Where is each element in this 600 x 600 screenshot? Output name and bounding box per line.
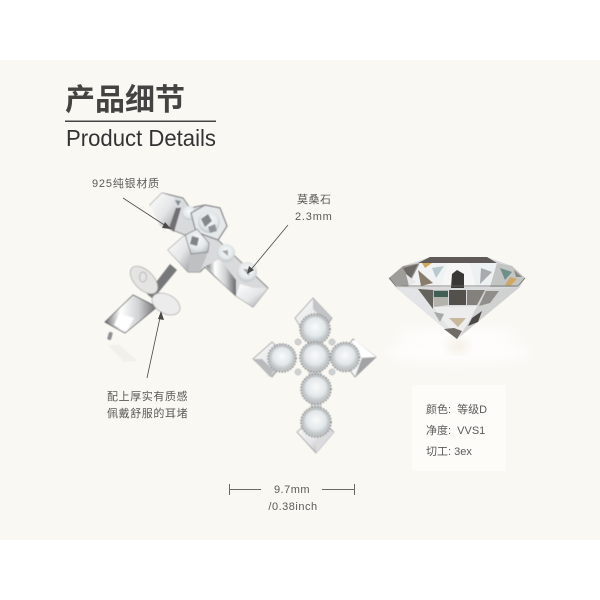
- stone: top: [300, 314, 330, 344]
- lower hexagon body: [168, 235, 192, 272]
- arrowhead: [158, 311, 164, 320]
- lower hexagon stone: [185, 229, 209, 254]
- diamond body: [389, 257, 525, 339]
- specification card: [412, 385, 506, 471]
- right arm lower band: [206, 259, 236, 296]
- leader line: [123, 198, 169, 228]
- pin reflection: [108, 345, 137, 362]
- stone: left: [268, 344, 296, 372]
- heading rule: [65, 120, 216, 122]
- pavilion facets: [395, 287, 520, 339]
- lower hexagon side: [188, 252, 208, 272]
- dimension bar right: [322, 484, 354, 495]
- dimension bar left: [230, 484, 261, 495]
- stone: right: [330, 342, 360, 372]
- arrowhead: [162, 222, 171, 229]
- stone: lower: [301, 374, 331, 404]
- label: silver: 925纯银材质: [92, 176, 160, 190]
- lower hexagon facet: [190, 236, 199, 246]
- callout: ear back: [107, 311, 188, 420]
- dimension value mm: 9.7mm: [274, 484, 310, 496]
- right arm stones: [217, 244, 257, 282]
- diamond girdle: [389, 278, 525, 286]
- crown facets: [389, 263, 525, 288]
- callout: silver material: [92, 176, 171, 229]
- left tip: [253, 342, 288, 377]
- right arm end cap: [236, 284, 268, 307]
- top arm stones: [173, 198, 196, 220]
- label: size: 2.3mm: [295, 211, 333, 223]
- diamond table band: [418, 257, 497, 263]
- leader line: [249, 225, 288, 272]
- arrowhead: [247, 266, 254, 274]
- clutch highlight: [114, 314, 134, 331]
- title: English: Product Details: [66, 125, 216, 151]
- top tip: [295, 298, 332, 336]
- label: line one: 配上厚实有质感: [107, 389, 188, 403]
- upper hexagon stone facets: [198, 211, 220, 233]
- card background: [412, 385, 506, 471]
- clutch barrel: [105, 295, 157, 333]
- width dimension: [230, 484, 354, 513]
- front view cross earring: [253, 298, 376, 453]
- top arm end: [150, 193, 178, 228]
- dimension value inch: /0.38inch: [268, 501, 318, 513]
- stone: centre: [300, 342, 330, 372]
- spec: cut: 切工: 3ex: [426, 445, 472, 458]
- label: line two: 佩戴舒服的耳堵: [107, 406, 188, 420]
- side view earring: [105, 193, 268, 362]
- upper hexagon bezel: [191, 205, 227, 240]
- cream panel: [0, 60, 600, 540]
- spec: colour: 颜色: 等级D: [426, 402, 487, 416]
- heading: [65, 84, 216, 151]
- callout: moissanite: [247, 193, 333, 274]
- title: Chinese: 产品细节: [65, 84, 185, 117]
- centre connectors: [295, 339, 335, 412]
- diamond: [385, 257, 529, 363]
- back disc: [125, 261, 163, 299]
- post: [147, 264, 177, 299]
- leader line: [147, 313, 161, 378]
- right tip: [340, 339, 376, 377]
- cross silhouette: [150, 193, 268, 307]
- clutch pin: [107, 332, 113, 340]
- bottom tip: [297, 415, 334, 453]
- stone: bottom: [301, 407, 331, 437]
- spec: clarity: 净度: VVS1: [426, 423, 485, 437]
- front disc: [148, 289, 184, 319]
- diamond reflection: [385, 330, 529, 363]
- top arm side: [169, 205, 181, 232]
- label: moissanite: 莫桑石: [297, 193, 332, 206]
